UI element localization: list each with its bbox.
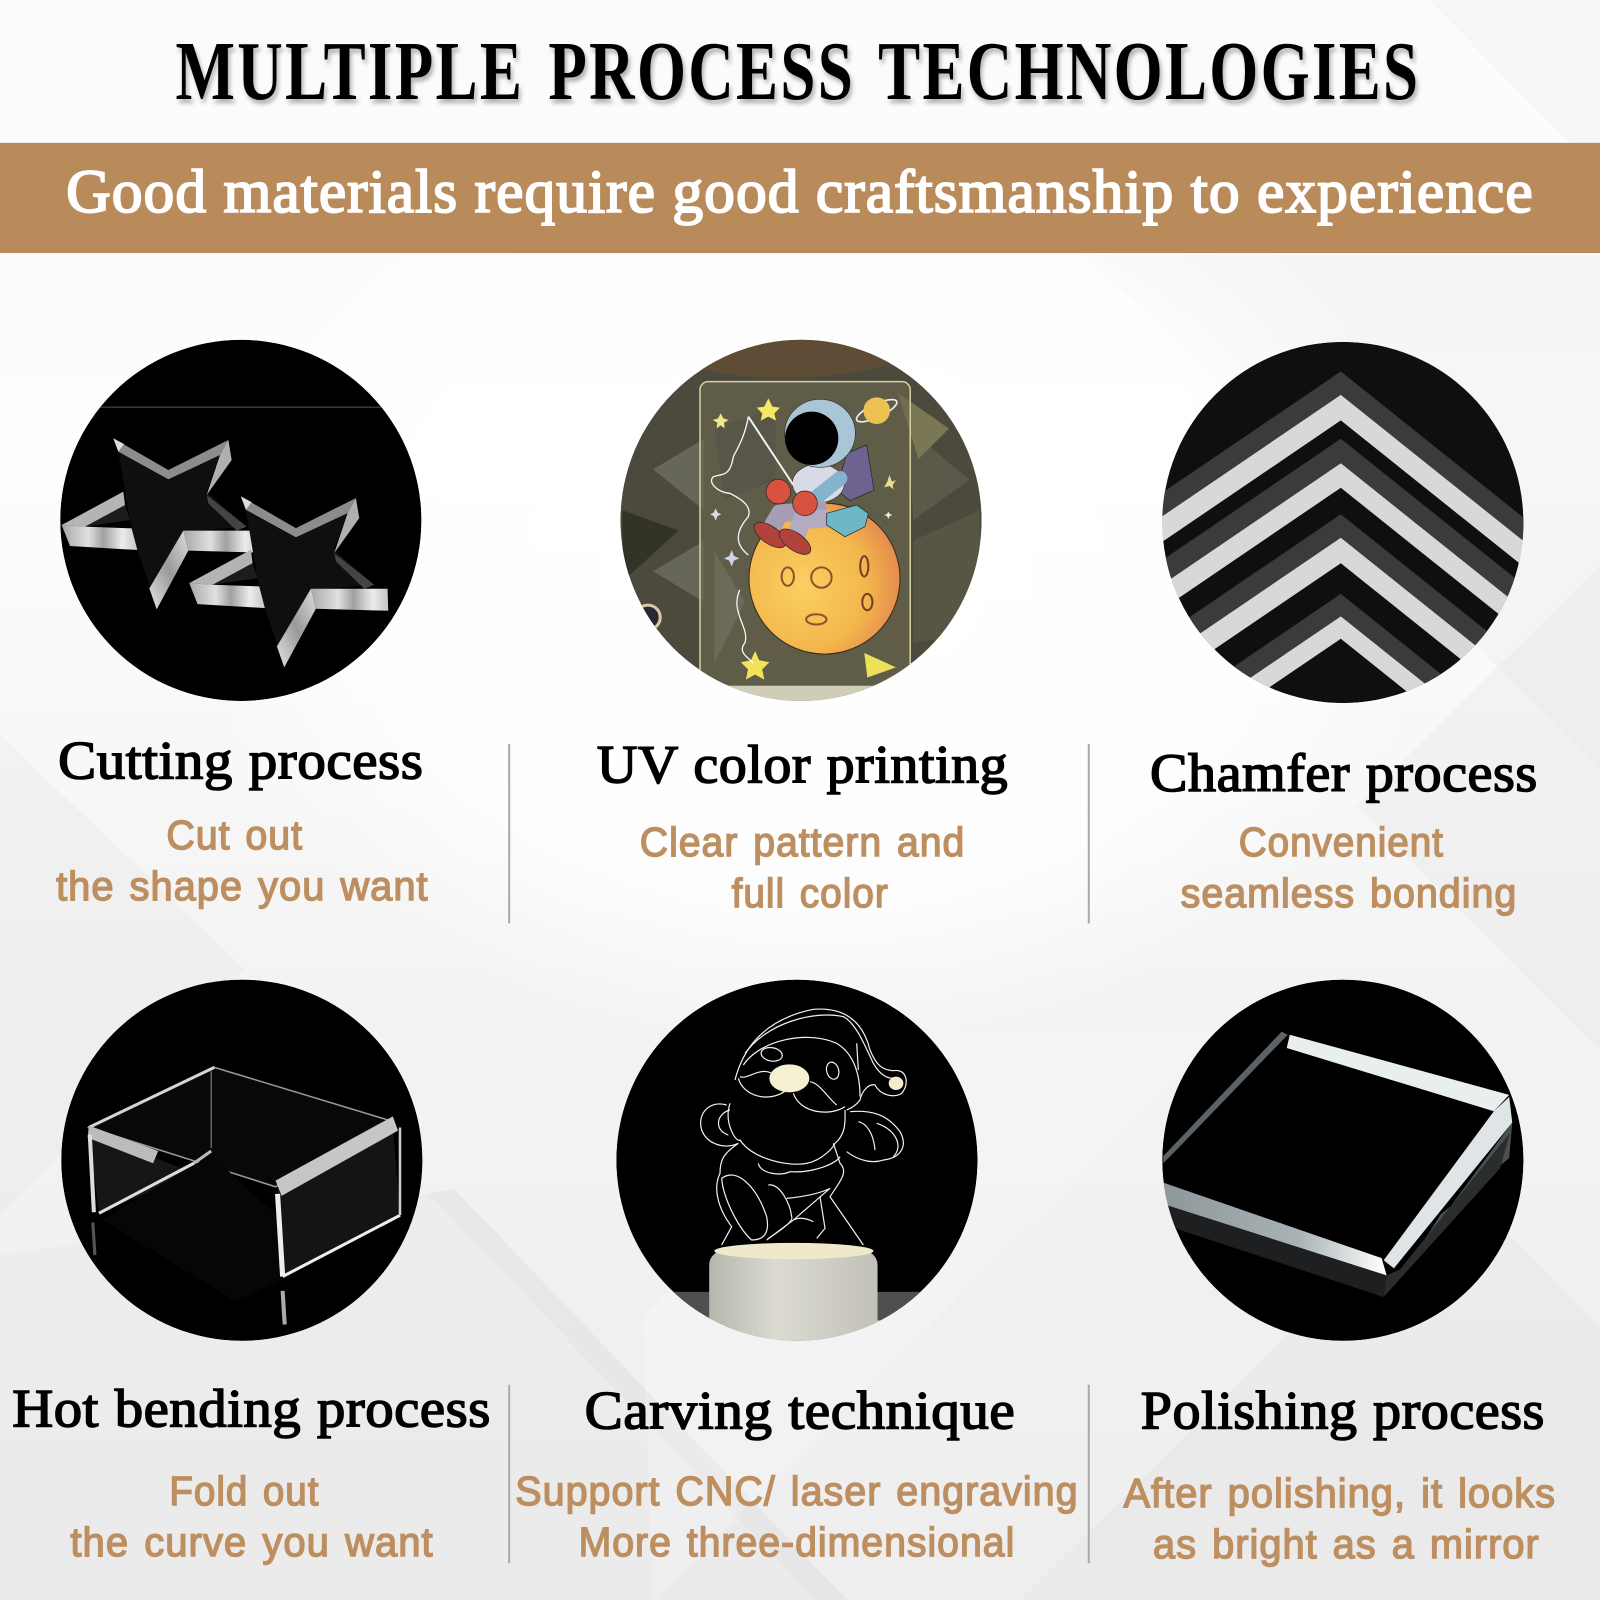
description: the curve you want — [70, 1519, 434, 1565]
description: Fold out — [169, 1468, 319, 1514]
panel: polishing process — [1123, 980, 1556, 1567]
description: Support CNC/ laser engraving — [515, 1468, 1079, 1514]
banner — [0, 143, 1600, 253]
description: Convenient — [1239, 819, 1444, 865]
panel: carving technique — [515, 980, 1079, 1565]
description: More three-dimensional — [579, 1519, 1015, 1565]
divider — [508, 1385, 510, 1563]
panel: cutting process — [56, 340, 429, 909]
description: Clear pattern and — [640, 819, 965, 865]
image: acrylic stars — [60, 340, 421, 701]
description: full color — [732, 870, 889, 916]
divider — [1088, 1385, 1090, 1563]
description: After polishing, it looks — [1123, 1470, 1556, 1516]
description: Cut out — [166, 812, 303, 858]
image: chamfered layers — [1162, 342, 1524, 703]
description — [56, 812, 429, 909]
divider — [1088, 744, 1090, 923]
description — [1181, 819, 1517, 916]
banner text: Good materials require good craftsmanship to experience — [66, 158, 1534, 226]
description — [640, 819, 965, 916]
description: as bright as a mirror — [1153, 1521, 1540, 1567]
description: seamless bonding — [1181, 870, 1517, 916]
heading: Polishing process — [1141, 1381, 1545, 1441]
image: bent acrylic stand — [61, 980, 422, 1341]
heading: Cutting process — [58, 731, 423, 791]
panel: chamfer process — [1137, 342, 1545, 916]
description: the shape you want — [56, 863, 429, 909]
panel: hot bending process — [12, 980, 491, 1565]
description — [70, 1468, 434, 1565]
image: carved santa lamp — [616, 980, 978, 1351]
panel: UV color printing — [597, 316, 1008, 916]
heading: Chamfer process — [1150, 743, 1538, 803]
heading: Carving technique — [585, 1381, 1015, 1441]
image: astronaut print — [620, 316, 982, 708]
description — [1123, 1470, 1556, 1567]
divider — [508, 744, 510, 923]
description — [515, 1468, 1079, 1565]
image: polished acrylic slab — [1162, 980, 1523, 1341]
heading: UV color printing — [597, 735, 1008, 795]
heading: Hot bending process — [12, 1379, 491, 1439]
